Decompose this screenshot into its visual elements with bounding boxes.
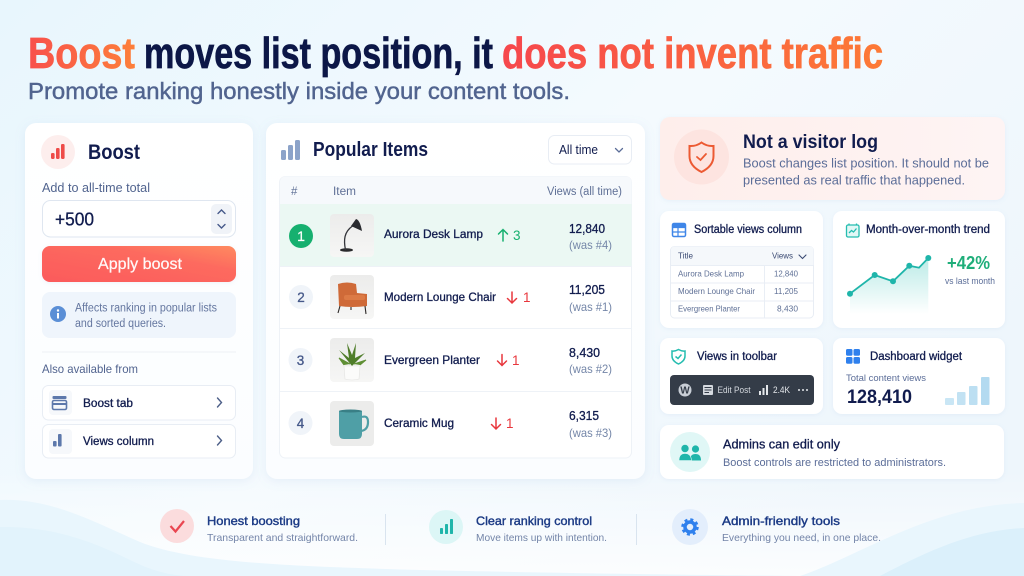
callout: not a visitor log <box>660 117 1005 200</box>
link: views column <box>42 424 236 458</box>
button: apply boost <box>42 246 236 282</box>
input: boost amount: +500 <box>55 210 94 230</box>
admin toolbar: W <box>680 386 690 396</box>
table header <box>280 176 632 204</box>
row 2: Modern Lounge Chair: 11,205 <box>569 283 605 297</box>
row 2: Modern Lounge Chair: 2 <box>297 290 305 305</box>
card: admins can edit only <box>660 425 1004 479</box>
card: dashboard widget: Dashboard widget <box>870 351 963 363</box>
change: down 1 <box>498 353 520 368</box>
callout: not a visitor log: Boost changes list position. It should not be <box>743 156 989 170</box>
card: month-over-month trend: Month-over-month trend <box>866 224 990 236</box>
row 4: Ceramic Mug <box>288 401 612 446</box>
card: sortable views column: Sortable views column <box>694 224 802 236</box>
change: down 1 <box>508 290 531 305</box>
link: boost tab: Boost tab <box>83 398 133 410</box>
change: down 1: 1 <box>512 353 520 368</box>
icon: trend chart <box>846 224 859 237</box>
field label: Add to all-time total <box>42 181 150 195</box>
title: moves list position, it <box>144 29 493 78</box>
mini table: 12,840 <box>774 268 798 278</box>
icon: popular bars <box>281 140 300 160</box>
subtitle: Promote ranking honestly inside your content tools. <box>28 78 570 104</box>
icon: table <box>672 224 686 236</box>
change: down 1: 1 <box>523 290 531 305</box>
row 1: Aurora Desk Lamp: 12,840 <box>569 222 605 236</box>
card: views in toolbar <box>660 338 823 414</box>
benefit: clear ranking control: Move items up with intention. <box>476 532 607 544</box>
row 3: Evergreen Planter: 8,430 <box>569 346 600 360</box>
card: views in toolbar: Views in toolbar <box>697 351 777 363</box>
table: ranking <box>280 176 632 458</box>
card: admins can edit only: Admins can edit only <box>723 438 841 452</box>
row 3: Evergreen Planter: 3 <box>297 353 304 368</box>
row 4: Ceramic Mug: 6,315 <box>569 409 599 423</box>
row 1: Aurora Desk Lamp: Aurora Desk Lamp <box>384 227 483 241</box>
thumbnail: planter <box>330 338 374 382</box>
card: dashboard widget: Total content views <box>846 373 926 384</box>
benefit: admin-friendly tools: Everything you need, in one place. <box>722 532 881 544</box>
card: month-over-month trend <box>833 211 1005 328</box>
link: views column: Views column <box>83 436 154 448</box>
change: up 3: 3 <box>513 228 521 243</box>
row 2: Modern Lounge Chair <box>289 275 612 319</box>
benefit: clear ranking control: Clear ranking control <box>476 514 592 528</box>
admin toolbar: Edit Post <box>718 385 751 395</box>
row 2: Modern Lounge Chair: (was #1) <box>569 300 612 314</box>
admin toolbar <box>670 375 814 405</box>
icon: admins <box>670 432 710 472</box>
row 3: Evergreen Planter: (was #2) <box>569 362 612 376</box>
mini table: 11,205 <box>774 286 798 296</box>
card: sortable views column <box>660 211 823 328</box>
title: Boost <box>28 29 135 78</box>
link: boost tab <box>42 386 236 420</box>
mini table <box>670 246 814 318</box>
benefit: admin-friendly tools: Admin-friendly tools <box>722 514 840 528</box>
button: apply boost: Apply boost <box>98 256 183 273</box>
mini bars <box>945 377 990 405</box>
row 4: Ceramic Mug: Ceramic Mug <box>384 416 454 430</box>
change: down 1: 1 <box>506 416 514 431</box>
mini table: Evergreen Planter <box>678 304 740 314</box>
row 4: Ceramic Mug: 4 <box>297 416 305 431</box>
card: month-over-month trend: vs last month <box>945 276 995 287</box>
card: admins can edit only: Boost controls are restricted to administrators. <box>723 457 946 469</box>
table header: # <box>291 186 298 198</box>
table header: Item <box>333 186 356 198</box>
panel: popular items <box>266 123 645 479</box>
info note <box>42 292 236 338</box>
callout: not a visitor log: presented as real traffic that happened. <box>743 172 965 188</box>
row 3: Evergreen Planter <box>288 338 612 382</box>
table header: Views (all time) <box>547 186 622 198</box>
thumbnail: lounge chair <box>330 275 374 319</box>
title <box>28 29 883 78</box>
title: does not invent traffic <box>502 29 883 78</box>
mini table: Modern Lounge Chair <box>678 286 755 296</box>
dropdown: all time <box>548 136 632 164</box>
icon: teal shield <box>672 350 685 364</box>
mini table: Aurora Desk Lamp <box>678 268 744 278</box>
change: up 3 <box>498 228 521 243</box>
stat: +42%: +42% <box>947 253 990 273</box>
row 4: Ceramic Mug: (was #3) <box>569 426 612 440</box>
row 1: Aurora Desk Lamp: 1 <box>297 228 305 244</box>
icon: boost bars <box>41 135 75 169</box>
also available label: Also available from <box>42 362 138 376</box>
mini table: Views <box>772 250 793 260</box>
benefit: honest boosting <box>160 509 358 544</box>
panel: boost controls <box>25 123 253 479</box>
mini table: 8,430 <box>777 304 798 314</box>
benefit: admin-friendly tools <box>672 509 881 545</box>
row 1: Aurora Desk Lamp <box>280 204 632 266</box>
dropdown: all time: All time <box>559 143 598 157</box>
callout: not a visitor log: Not a visitor log <box>743 132 878 153</box>
admin toolbar: 2.4K <box>773 385 790 395</box>
mini table: Title <box>678 250 693 260</box>
panel heading: Boost: Boost <box>88 141 140 164</box>
line chart <box>847 255 931 314</box>
info note: Affects ranking in popular lists <box>75 302 217 314</box>
benefit: honest boosting: Transparent and straightforward. <box>207 532 358 544</box>
input: boost amount <box>42 200 236 237</box>
row 3: Evergreen Planter: Evergreen Planter <box>384 353 480 367</box>
info note: and sorted queries. <box>75 318 166 330</box>
thumbnail: desk lamp <box>330 214 374 257</box>
benefit: honest boosting: Honest boosting <box>207 514 300 528</box>
row 2: Modern Lounge Chair: Modern Lounge Chair <box>384 290 496 304</box>
row 1: Aurora Desk Lamp: (was #4) <box>569 238 612 252</box>
thumbnail: mug <box>330 401 374 446</box>
card: dashboard widget <box>833 338 1005 414</box>
card: dashboard widget: 128,410 <box>847 387 912 408</box>
benefit: clear ranking control <box>429 510 607 544</box>
icon: shield check <box>674 130 729 184</box>
change: down 1 <box>492 416 514 431</box>
heading: popular items: Popular Items <box>313 139 428 161</box>
icon: dashboard grid <box>846 349 860 364</box>
